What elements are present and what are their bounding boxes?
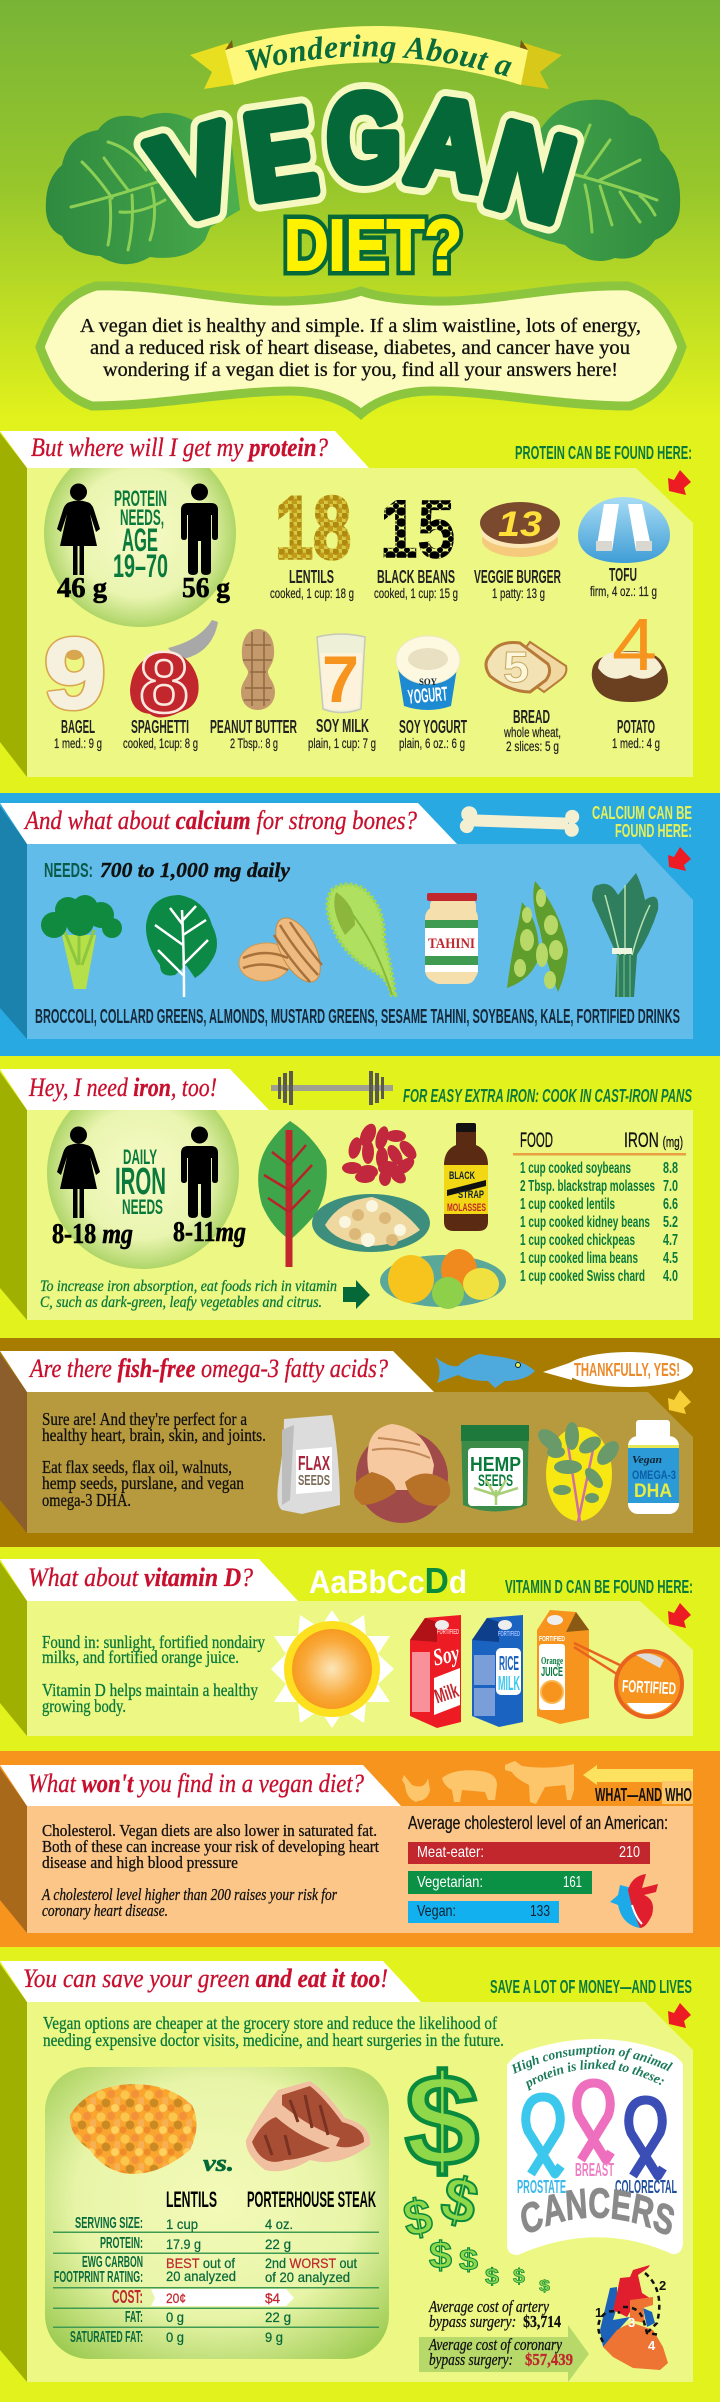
comparison table: PROTEIN: xyxy=(100,2235,143,2252)
icon: rice milk carton: RICE xyxy=(499,1653,519,1675)
title: VEGAN: V xyxy=(139,98,251,249)
arrow xyxy=(668,1390,691,1414)
comparison table: COST: xyxy=(112,2287,143,2307)
icon: molasses bottle: STRAP xyxy=(458,1189,484,1201)
cancer panel xyxy=(507,2039,683,2255)
intro text: A vegan diet is healthy and simple. If a slim waistline, lots of energy, xyxy=(80,316,641,337)
arrow xyxy=(668,2003,691,2028)
cholesterol text: A cholesterol level higher than 200 raises your risk for xyxy=(41,1885,337,1904)
icon: breast ribbon xyxy=(577,2083,611,2160)
coronary cost arrow: Average cost of coronary xyxy=(428,2335,562,2354)
title: VEGAN: G xyxy=(328,71,400,205)
icon: almonds xyxy=(237,911,329,989)
food labels row 2 xyxy=(61,707,655,737)
heading ribbon xyxy=(0,1351,434,1392)
icon: molasses bottle: MOLASSES xyxy=(447,1202,486,1214)
needs egg xyxy=(47,1077,239,1269)
speech bubble xyxy=(543,1352,693,1387)
icon: cow xyxy=(505,1761,574,1804)
icon: prostate ribbon xyxy=(526,2097,561,2174)
vitamin d text: Found in: sunlight, fortified nondairy xyxy=(42,1632,265,1652)
comparison table: 2nd WORST out xyxy=(265,2255,357,2271)
vitamin c tip: To increase iron absorption, eat foods rich in vitamin xyxy=(40,1278,337,1295)
icon: spaghetti 8: 8 xyxy=(139,635,189,731)
comparison table: EWG CARBON xyxy=(82,2254,143,2271)
icon: dumbbell xyxy=(271,1071,393,1105)
icon: broccoli xyxy=(41,895,122,989)
icon: orange juice carton: Orange xyxy=(541,1656,563,1667)
icon: kidney beans xyxy=(342,1121,420,1186)
comparison table: 4 oz. xyxy=(265,2216,293,2232)
icon: flax bag: FLAX xyxy=(298,1453,330,1475)
icon: orange juice carton: FORTIFIED xyxy=(539,1636,565,1643)
icon: rice milk carton: MILK xyxy=(498,1673,520,1695)
artery cost xyxy=(428,2297,561,2331)
icon: right leaf xyxy=(500,100,680,261)
icon: bread 5: 5 xyxy=(503,643,529,692)
header xyxy=(35,26,687,420)
title: VEGAN: N xyxy=(474,98,586,248)
iron table: 1 cup cooked lima beans xyxy=(520,1250,638,1267)
bar chart: Vegetarian: xyxy=(417,1874,483,1891)
comparison table: 0 g xyxy=(166,2329,184,2345)
daily iron needs text: DAILY xyxy=(123,1146,157,1169)
icon: bagel 9: 9 xyxy=(44,618,106,730)
heading ribbon: And what about calcium for strong bones? xyxy=(23,806,417,835)
panel side band xyxy=(0,1964,27,2382)
icon: tofu xyxy=(578,497,670,563)
cancer panel heading: High consumption of animal xyxy=(512,2044,673,2074)
icon: potato 4 xyxy=(592,603,668,702)
bar chart xyxy=(408,1842,650,1923)
heading ribbon xyxy=(0,1559,298,1601)
food labels row 1: TOFU xyxy=(609,565,637,585)
vitamin c tip: C, such as dark-green, leafy vegetables and citrus. xyxy=(40,1294,322,1311)
intro text xyxy=(80,316,641,381)
icon: soy milk carton: Milk xyxy=(432,1680,462,1708)
icon: rice milk carton xyxy=(472,1615,523,1727)
food labels row 1 xyxy=(289,565,637,587)
iron table: FOOD xyxy=(520,1129,553,1152)
heading ribbon: What about vitamin D? xyxy=(28,1563,253,1592)
panel: cholesterol xyxy=(0,1761,693,1933)
icon: lentils 18: 18 xyxy=(275,478,351,577)
needs egg xyxy=(44,439,236,627)
food labels row 2: SOY MILK xyxy=(316,716,369,736)
icon: orange juice carton xyxy=(537,1610,589,1724)
daily iron needs text: NEEDS xyxy=(122,1196,163,1219)
comparison table: 22 g xyxy=(265,2309,291,2325)
icon: heart with bypass: 2 xyxy=(659,2278,666,2293)
omega text: hemp seeds, purslane, and vegan xyxy=(42,1473,244,1493)
title: VEGAN: E xyxy=(238,84,323,225)
comparison table: $4 xyxy=(265,2290,280,2306)
title: DIET?: DIET? xyxy=(284,206,462,286)
icon: dollar signs: $ xyxy=(405,2047,479,2193)
banner: wondering about a: Wondering About a xyxy=(246,34,512,76)
food amounts row 2: 1 med.: 4 g xyxy=(612,736,660,751)
food labels row 1: LENTILS xyxy=(289,567,334,587)
comparison table xyxy=(53,2187,379,2346)
title: DIET?: DIET? xyxy=(284,206,462,286)
food amounts row 1 xyxy=(270,584,657,601)
panel: vitamin d xyxy=(0,1559,693,1736)
iron table: 1 cup cooked lentils xyxy=(520,1196,615,1213)
icon: potato 4: 4 xyxy=(612,603,657,686)
bar chart: 133 xyxy=(530,1903,550,1920)
56 g: 56 g xyxy=(182,573,230,604)
heading ribbon: Are there fish-free omega-3 fatty acids? xyxy=(28,1354,388,1383)
comparison table: SERVING SIZE: xyxy=(75,2215,143,2232)
food amounts row 1: 1 patty: 13 g xyxy=(492,586,545,601)
icon: flax bag: SEEDS xyxy=(298,1472,330,1489)
banner: wondering about a xyxy=(190,26,562,89)
icon: left leaf xyxy=(46,113,240,264)
icon: dollar signs: $ xyxy=(434,2163,485,2238)
title: VEGAN: A xyxy=(401,73,497,216)
who arrow xyxy=(583,1765,693,1805)
intro plaque xyxy=(40,286,682,414)
vitamin c tip xyxy=(40,1278,337,1311)
heading ribbon xyxy=(0,1069,269,1110)
daily iron needs text: IRON xyxy=(115,1161,166,1203)
needs text: NEEDS: xyxy=(44,860,93,882)
comparison box xyxy=(45,2067,389,2359)
icon: molasses bottle xyxy=(444,1123,488,1231)
comparison table: FAT: xyxy=(125,2309,143,2326)
46 g: 46 g xyxy=(57,573,107,604)
alphabet: AaBbCcDd xyxy=(309,1560,467,1601)
icon: man xyxy=(181,1126,218,1218)
icon: flax bag xyxy=(277,1415,340,1514)
comparison table: 22 g xyxy=(265,2236,291,2252)
icon: bread 5 xyxy=(486,642,566,692)
omega text: healthy heart, brain, skin, and joints. xyxy=(42,1425,266,1445)
needs amount: 700 to 1,000 mg daily xyxy=(100,858,291,882)
protein needs text: PROTEIN xyxy=(114,486,167,511)
icon: soybeans xyxy=(507,881,568,992)
title: VEGAN: G xyxy=(328,71,400,205)
food amounts row 1: cooked, 1 cup: 18 g xyxy=(270,586,354,601)
food amounts row 2 xyxy=(54,725,660,754)
icon: dollar signs: $ xyxy=(429,2235,452,2277)
heading ribbon xyxy=(0,803,457,844)
panel: omega-3 xyxy=(0,1351,693,1533)
heading ribbon: You can save your green and eat it too! xyxy=(23,1964,388,1993)
panel body xyxy=(27,1392,693,1533)
coronary cost arrow: $57,439 xyxy=(525,2350,573,2369)
icon: steak xyxy=(246,2081,370,2171)
icon: citrus plate xyxy=(380,1249,506,1309)
comparison table: 9 g xyxy=(265,2329,283,2345)
comparison table: 0 g xyxy=(166,2309,184,2325)
icon: dha bottle: Vegan xyxy=(632,1454,662,1466)
panel side band xyxy=(0,1562,27,1736)
panel body xyxy=(27,2002,693,2382)
protein needs text: NEEDS, xyxy=(120,505,164,530)
icon: heart with bypass: 1 xyxy=(595,2305,602,2320)
icon: soy milk carton: Soy xyxy=(431,1641,462,1672)
panel side band xyxy=(0,1072,27,1320)
food labels row 2: PEANUT BUTTER xyxy=(210,717,297,737)
fortified callout xyxy=(574,1643,682,1717)
comparison table: SATURATED FAT: xyxy=(70,2329,143,2346)
panel side band xyxy=(0,806,27,1039)
vitamin d text: growing body. xyxy=(42,1696,126,1716)
savings text xyxy=(43,2013,504,2050)
title: VEGAN: N xyxy=(474,98,586,248)
cancer labels: PROSTATE xyxy=(517,2177,566,2197)
food labels row 1: VEGGIE BURGER xyxy=(474,567,561,587)
icon: soy milk carton xyxy=(410,1615,462,1728)
iron table: 1 cup cooked soybeans xyxy=(520,1160,631,1177)
coronary cost arrow xyxy=(419,2325,589,2382)
panel: calcium xyxy=(0,803,693,1039)
iron table: 5.2 xyxy=(663,1214,678,1231)
iron table: 1 cup cooked kidney beans xyxy=(520,1214,650,1231)
panel: iron xyxy=(0,1069,693,1320)
cholesterol text xyxy=(41,1821,379,1920)
vs.: vs. xyxy=(203,2151,234,2177)
icon: collard greens xyxy=(146,895,217,997)
savings text: Vegan options are cheaper at the grocery store and reduce the likelihood of xyxy=(43,2013,497,2033)
icon: heart with bypass: 4 xyxy=(648,2338,656,2353)
panel body xyxy=(27,1110,693,1320)
calcium label xyxy=(592,803,692,841)
icon: orange juice carton: JUICE xyxy=(541,1664,563,1679)
comparison table: LENTILS xyxy=(166,2187,217,2212)
comparison table: FOOTPRINT RATING: xyxy=(54,2269,143,2286)
omega text xyxy=(42,1409,266,1510)
cholesterol text: Cholesterol. Vegan diets are also lower in saturated fat. xyxy=(42,1821,377,1840)
icon: dollar signs xyxy=(399,2047,550,2295)
omega text: Eat flax seeds, flax oil, walnuts, xyxy=(42,1457,232,1477)
savings text: needing expensive doctor visits, medicine, and heart surgeries in the future. xyxy=(43,2030,504,2050)
icon: molasses bottle: BLACK xyxy=(449,1170,475,1182)
icon: mustard greens xyxy=(327,884,395,995)
icon: man xyxy=(181,484,218,575)
omega text: omega-3 DHA. xyxy=(42,1490,131,1510)
bar chart: 161 xyxy=(563,1874,582,1891)
icon: purslane xyxy=(534,1422,623,1522)
icon: heart xyxy=(610,1874,658,1928)
bar chart: Meat-eater: xyxy=(417,1844,484,1861)
arrow xyxy=(668,470,691,495)
icon: soy milk glass xyxy=(317,634,365,716)
iron table xyxy=(513,1129,686,1285)
arrow xyxy=(343,1280,370,1309)
icon: black beans 15: 15 xyxy=(380,484,455,575)
vitamin d text xyxy=(42,1632,265,1716)
icon: veggie burger xyxy=(480,502,560,557)
food amounts row 2: 2 Tbsp.: 8 g xyxy=(230,736,278,751)
icon: dha bottle: DHA xyxy=(634,1481,672,1502)
icon: bagel 9: 9 xyxy=(44,618,106,730)
icon: heart with bypass: 3 xyxy=(628,2315,635,2330)
comparison table: 20¢ xyxy=(166,2290,186,2306)
cancer labels: BREAST xyxy=(575,2160,614,2180)
cancer panel heading: protein is linked to these: xyxy=(526,2059,664,2091)
icon: chickpeas plate xyxy=(312,1194,430,1252)
heading ribbon: But where will I get my protein? xyxy=(31,433,328,462)
food labels row 1: BLACK BEANS xyxy=(377,567,455,587)
iron table: 6.6 xyxy=(663,1196,678,1213)
heading ribbon xyxy=(0,1961,421,2002)
title: VEGAN: V xyxy=(139,98,251,249)
panel body xyxy=(27,468,693,777)
food amounts row 2: plain, 1 cup: 7 g xyxy=(308,736,376,751)
icon: chicken xyxy=(402,1775,430,1802)
cost highlight xyxy=(151,2289,294,2306)
protein needs text: AGE xyxy=(122,522,158,558)
food amounts row 2: 2 slices: 5 g xyxy=(506,739,559,754)
icon: kale xyxy=(592,873,658,997)
icon: woman xyxy=(57,1126,100,1218)
iron table: 1 cup cooked chickpeas xyxy=(520,1232,635,1249)
food amounts row 2: plain, 6 oz.: 6 g xyxy=(399,736,465,751)
icon: veggie burger: 13 xyxy=(498,505,543,544)
daily iron needs text xyxy=(115,1146,166,1219)
icon: woman xyxy=(57,484,100,575)
icon: dha bottle xyxy=(628,1420,679,1514)
icon: lentil pile xyxy=(70,2084,197,2174)
vitamin d text: Vitamin D helps maintain a healthy xyxy=(42,1680,258,1700)
food amounts row 1: firm, 4 oz.: 11 g xyxy=(590,584,657,599)
panel: protein xyxy=(0,431,693,777)
intro text: and a reduced risk of heart disease, diabetes, and cancer have you xyxy=(90,338,630,359)
icon: tahini jar xyxy=(425,893,478,984)
iron table: 7.0 xyxy=(663,1178,678,1195)
comparison table: 17.9 g xyxy=(166,2236,201,2252)
iron table: 4.0 xyxy=(663,1268,678,1285)
comparison table: of 20 analyzed xyxy=(265,2269,350,2285)
panel side band xyxy=(0,1354,27,1533)
vitamin d text: milks, and fortified orange juice. xyxy=(42,1647,239,1667)
icon: sun xyxy=(271,1610,394,1728)
icon: dollar signs: $ xyxy=(399,2187,437,2247)
cancer panel heading xyxy=(512,2044,673,2091)
icon: soy yogurt cup: SOY xyxy=(419,677,437,687)
icon: fish xyxy=(435,1354,535,1388)
8-18 mg: 8-18 mg xyxy=(52,1219,133,1250)
panel side band xyxy=(0,433,27,777)
panel body xyxy=(27,1806,693,1933)
title: VEGAN: E xyxy=(238,84,323,225)
food labels row 2: SOY YOGURT xyxy=(399,717,467,737)
food amounts row 2: 1 med.: 9 g xyxy=(54,736,102,751)
cholesterol text: disease and high blood pressure xyxy=(42,1853,238,1872)
bar chart: 210 xyxy=(619,1844,640,1861)
icon: soy yogurt cup: YOGURT xyxy=(407,683,449,709)
icon: colorectal ribbon xyxy=(629,2100,663,2176)
icon: swiss chard xyxy=(258,1121,327,1267)
food amounts row 1: cooked, 1 cup: 15 g xyxy=(374,586,458,601)
panel: savings xyxy=(0,1961,693,2382)
fortified callout: FORTIFIED xyxy=(622,1677,676,1698)
iron table: 4.5 xyxy=(663,1250,678,1267)
comparison table: PORTERHOUSE STEAK xyxy=(247,2187,376,2212)
omega text: Sure are! And they're perfect for a xyxy=(42,1409,247,1429)
iron table: IRON (mg) xyxy=(624,1129,683,1152)
arrow xyxy=(668,1603,691,1628)
icon: hemp bag xyxy=(461,1425,529,1512)
comparison table: 20 analyzed xyxy=(166,2268,236,2284)
icon: spaghetti 8 xyxy=(130,620,218,731)
comparison table: BEST out of xyxy=(166,2255,235,2271)
food labels row 2: SPAGHETTI xyxy=(131,717,189,737)
icon: tahini jar: TAHINI xyxy=(428,936,475,952)
icon: soy yogurt cup xyxy=(396,636,460,710)
food labels row 2: BAGEL xyxy=(61,717,95,737)
icon: dha bottle: OMEGA-3 xyxy=(632,1468,676,1482)
title: VEGAN xyxy=(139,71,586,249)
title: VEGAN: A xyxy=(401,73,497,216)
bar chart: Vegan: xyxy=(417,1903,456,1920)
icon: dollar signs: $ xyxy=(539,2278,550,2295)
cancers word xyxy=(521,2188,674,2235)
cancer labels xyxy=(517,2160,677,2197)
icon: bone xyxy=(460,806,579,837)
food amounts row 2: whole wheat, xyxy=(503,725,561,740)
food amounts row 2: cooked, 1cup: 8 g xyxy=(123,736,198,751)
icon: dollar signs: $ xyxy=(485,2264,499,2289)
icon: dollar signs: $ xyxy=(459,2244,478,2277)
artery cost: Average cost of artery xyxy=(428,2297,549,2316)
icon: hemp bag: SEEDS xyxy=(478,1471,513,1490)
icon: rice milk carton: FORTIFIED xyxy=(498,1631,520,1638)
comparison table: 1 cup xyxy=(166,2216,198,2232)
panel side band xyxy=(0,1768,27,1933)
icon: soy milk glass: 7 xyxy=(322,642,359,716)
protein needs text: 19–70 xyxy=(113,548,168,584)
protein needs text xyxy=(113,486,168,584)
artery cost: bypass surgery: $3,714 xyxy=(429,2312,561,2331)
iron table: 4.7 xyxy=(663,1232,678,1249)
icon: peanut xyxy=(241,629,275,710)
icon: walnut xyxy=(354,1424,450,1523)
cholesterol text: coronary heart disease. xyxy=(42,1901,168,1920)
coronary cost arrow: bypass surgery: xyxy=(429,2350,513,2369)
food labels row 2: POTATO xyxy=(617,717,655,737)
iron table: 8.8 xyxy=(663,1160,678,1177)
intro text: wondering if a vegan diet is for you, find all your answers here! xyxy=(103,360,618,381)
heading ribbon xyxy=(0,431,369,468)
heading ribbon xyxy=(0,1765,401,1806)
icon: hemp bag: HEMP xyxy=(470,1454,521,1476)
heading ribbon: What won't you find in a vegan diet? xyxy=(28,1769,364,1798)
icon: heart with bypass xyxy=(595,2265,668,2370)
iron table: 1 cup cooked Swiss chard xyxy=(520,1268,645,1285)
icon: dollar signs: $ xyxy=(513,2266,525,2288)
icon: pig xyxy=(442,1770,497,1802)
8-11 mg: 8-11mg xyxy=(173,1217,246,1248)
panel body xyxy=(27,1601,693,1736)
cholesterol text: Both of these can increase your risk of developing heart xyxy=(42,1837,379,1856)
food labels row 2: BREAD xyxy=(513,707,550,727)
icon: soy milk carton: FORTIFIED xyxy=(437,1629,459,1636)
arrow xyxy=(668,847,691,871)
cancers word: CANCERS xyxy=(521,2188,674,2235)
heading ribbon: Hey, I need iron, too! xyxy=(28,1073,217,1102)
panel body xyxy=(27,844,693,1039)
